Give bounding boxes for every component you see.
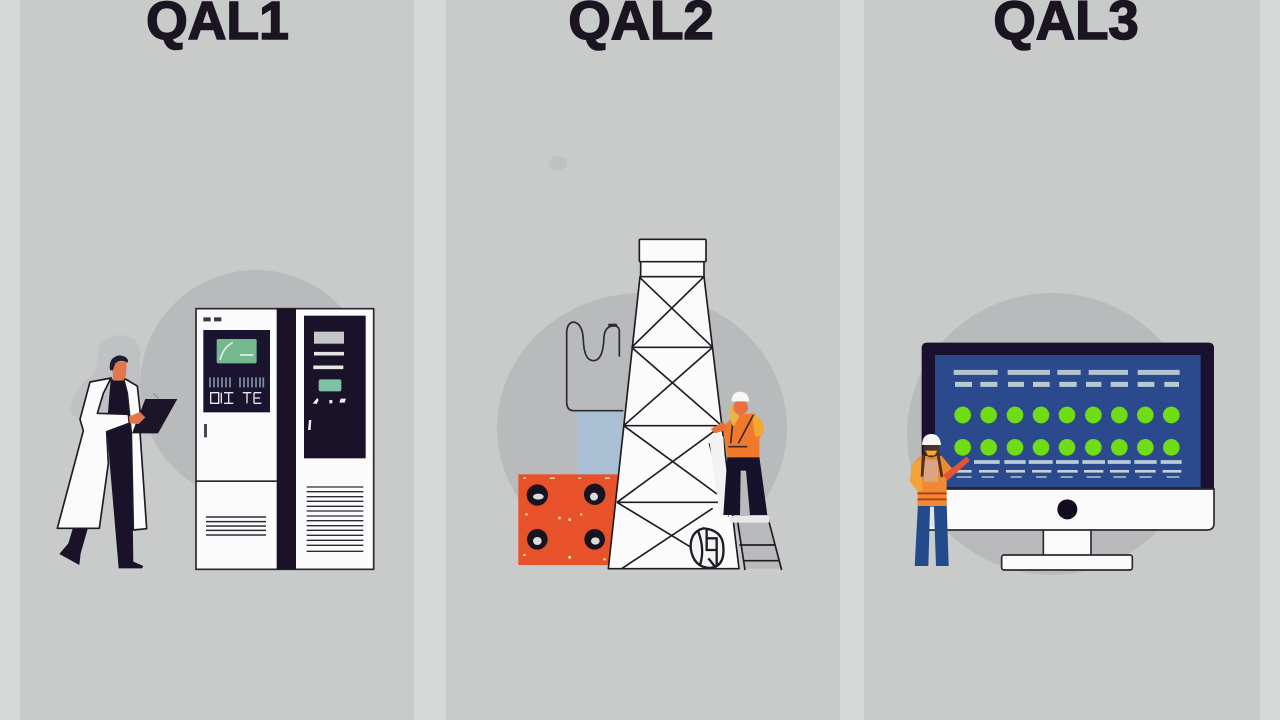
header bars (954, 365, 1180, 380)
illustration: cabinet (196, 309, 374, 569)
cabinet body (196, 309, 374, 569)
front leg (107, 427, 143, 568)
top label (203, 317, 221, 321)
status lights row two (954, 439, 1180, 456)
highlight bottom right (591, 537, 600, 545)
worker trousers (723, 457, 767, 515)
right screen (304, 316, 366, 458)
sweater (106, 379, 133, 437)
worker face (733, 400, 748, 415)
lower bars one (974, 456, 1182, 467)
cable cap (608, 324, 617, 327)
right vents (307, 487, 363, 551)
tower lattice (617, 277, 731, 569)
monitor frame (922, 343, 1214, 490)
worker trousers (915, 503, 949, 566)
clipboard (132, 399, 177, 433)
ladder top (709, 434, 728, 517)
right screen grey block (314, 332, 344, 344)
orange control panel (518, 474, 617, 565)
left screen (203, 330, 270, 412)
lower bars two (956, 467, 1181, 475)
worker vest (910, 456, 952, 506)
worker belt stripe (917, 493, 947, 499)
back leg (59, 527, 88, 565)
cable coil (691, 528, 723, 568)
hand (129, 412, 145, 424)
worker trouser gap highlight (930, 507, 934, 527)
lower bars three (957, 474, 1179, 479)
highlight top right (590, 493, 598, 501)
right screen green block (319, 379, 341, 391)
person shadow (70, 335, 140, 440)
illustration: measurement tower (518, 239, 782, 570)
panel: QAL2 (446, 0, 840, 720)
knob highlights (533, 493, 600, 545)
worker sleeve (752, 414, 763, 437)
tower neck (641, 262, 704, 277)
knob top left (527, 484, 548, 506)
screen text row two (211, 393, 261, 403)
worker shoulder highlight (910, 458, 923, 492)
worker helmet (731, 392, 749, 401)
tower body (608, 277, 739, 569)
monitor base (1002, 555, 1132, 570)
panel rivets (523, 477, 610, 560)
panel background (864, 0, 1260, 720)
blue column (577, 412, 622, 475)
illustration: scientist in lab coat (57, 355, 177, 568)
illustration: monitor (910, 343, 1214, 570)
backdrop circle (907, 293, 1197, 575)
worker chin mask (925, 451, 937, 455)
coat left side (57, 378, 129, 528)
dark centre column (277, 309, 296, 569)
panel: QAL3 (864, 0, 1260, 720)
worker face (923, 441, 939, 457)
status lights row one (954, 407, 1180, 423)
monitor chin (922, 489, 1214, 530)
green display curve (220, 343, 253, 360)
worker arm (711, 422, 727, 433)
knob bottom right (584, 529, 605, 550)
panel: QAL1 (20, 0, 414, 720)
worker harness (728, 415, 753, 447)
cable loop (567, 322, 623, 411)
door divider (196, 480, 277, 482)
worker helmet (922, 434, 941, 445)
green display (217, 339, 257, 363)
highlight top left (533, 494, 544, 500)
ladder platform (730, 516, 769, 523)
highlight bottom left (533, 537, 542, 545)
sub-header bars (955, 377, 1179, 392)
worker vest (723, 413, 763, 457)
panel background (446, 0, 840, 720)
left vents (206, 517, 266, 535)
hair (110, 355, 128, 371)
right screen buttons (308, 398, 346, 430)
monitor stand (1043, 528, 1091, 556)
neck and face (112, 362, 127, 381)
coat right side (123, 378, 147, 530)
panel knobs (527, 484, 605, 550)
worker reflective chest (924, 460, 938, 482)
worker hair (730, 403, 739, 427)
screen text row one (210, 377, 263, 387)
backdrop circle (140, 270, 372, 502)
worker pointing arm (943, 457, 970, 481)
door handle (204, 424, 207, 437)
knob bottom left (527, 529, 548, 550)
worker hair (921, 453, 943, 477)
ladder steps (735, 522, 781, 569)
ladder (709, 443, 782, 570)
backdrop circle (497, 293, 787, 563)
right screen bars (313, 354, 344, 367)
smudge (549, 156, 567, 170)
tower top cap (639, 239, 706, 262)
panel background (20, 0, 414, 720)
worker (910, 434, 970, 566)
monitor screen (935, 355, 1201, 487)
worker (711, 392, 767, 515)
clipboard clip (153, 393, 159, 399)
camera dot (1057, 499, 1077, 519)
knob top right (584, 484, 605, 505)
